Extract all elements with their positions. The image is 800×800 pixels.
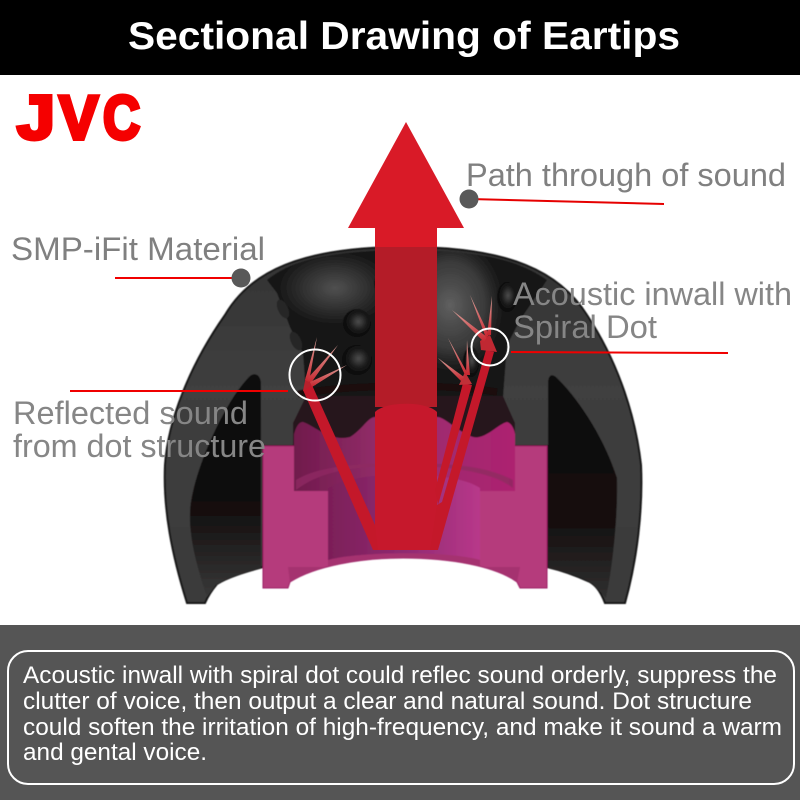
eartip cross-section — [165, 233, 641, 603]
middle burst — [438, 338, 472, 385]
description text: and gental voice. — [23, 739, 207, 766]
pink collar — [263, 446, 547, 588]
callout: path through of sound — [460, 157, 786, 208]
pink foot band — [288, 552, 520, 582]
description text: could soften the irritation of high-frequency, and make it sound a warm — [23, 714, 782, 741]
outer dome — [165, 247, 641, 603]
inner chamber highlights — [286, 252, 505, 365]
title banner: Sectional Drawing of Eartips — [128, 15, 680, 58]
left cavity — [190, 374, 261, 597]
description text — [23, 662, 782, 766]
right burst — [452, 295, 497, 352]
pink neck — [328, 474, 480, 560]
title banner — [0, 0, 800, 75]
JVC logo: V — [59, 83, 98, 152]
left burst — [303, 337, 347, 391]
dots on inner wall — [274, 270, 517, 377]
callout: SMP-iFit material — [11, 231, 265, 288]
description panel — [0, 625, 800, 800]
left ray — [303, 385, 378, 550]
right cavity — [548, 375, 617, 598]
JVC logo: C — [103, 84, 140, 153]
callout: acoustic inwall: Acoustic inwall with — [513, 276, 792, 312]
callout: reflected sound — [13, 350, 340, 464]
middle ray — [435, 383, 472, 505]
description text: Acoustic inwall with spiral dot could reflec sound orderly, suppress the — [23, 662, 777, 689]
callout: reflected sound: from dot structure — [13, 428, 266, 464]
pink chamber rim — [296, 463, 513, 490]
callout: path through of sound: Path through of sound — [466, 157, 786, 193]
inner chamber — [267, 250, 547, 407]
JVC logo — [17, 83, 140, 153]
lower chamber and ring — [293, 396, 515, 450]
pink upper chamber — [294, 417, 515, 491]
callout: acoustic inwall — [472, 276, 792, 366]
JVC logo: J — [17, 83, 55, 152]
callout: SMP-iFit material: SMP-iFit Material — [11, 231, 265, 267]
callout: acoustic inwall: Spiral Dot — [513, 309, 657, 345]
callout: reflected sound: Reflected sound — [13, 395, 248, 431]
right ray — [430, 350, 494, 550]
reflected sound rays — [303, 295, 497, 550]
central sound arrow — [348, 122, 464, 550]
description text: clutter of voice, then output a clear and natural sound. Dot structure — [23, 688, 752, 715]
